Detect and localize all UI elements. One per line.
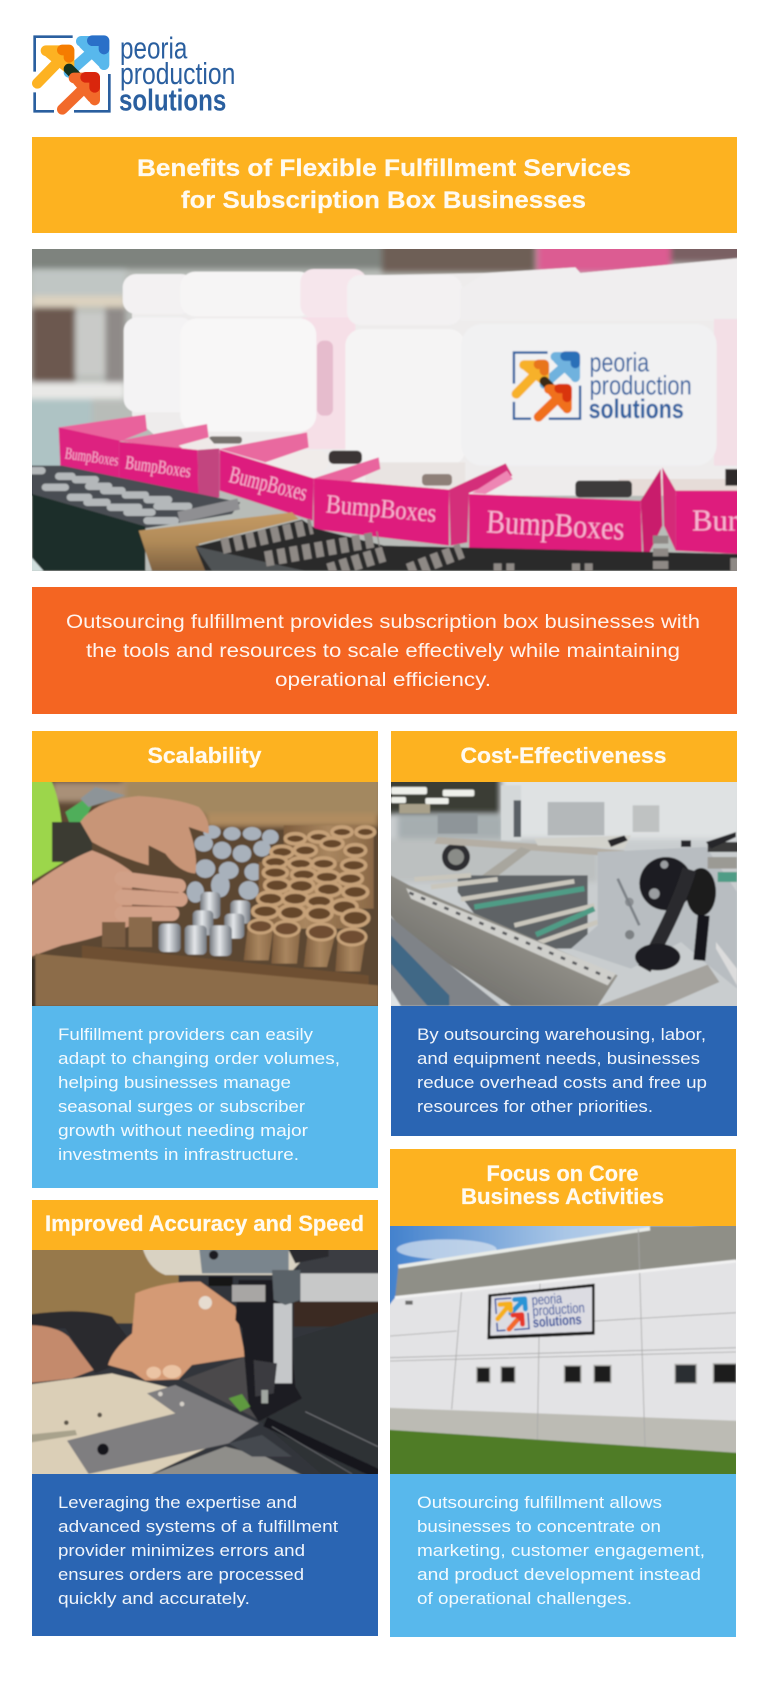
cardboard box front <box>35 954 378 1006</box>
pulleys and timing belt <box>639 857 693 910</box>
text panel: Improved Accuracy and Speed <box>32 1474 378 1636</box>
intro text: operational efficiency. <box>275 669 491 691</box>
intro text: the tools and resources to scale effectively while maintaining <box>86 640 680 662</box>
logo on box lid: peoria <box>590 347 650 378</box>
roller conveyor, right <box>195 520 739 571</box>
hero photo: pink subscription boxes on a conveyor <box>32 249 738 571</box>
sign logo <box>495 1289 586 1334</box>
main hand <box>108 1282 245 1381</box>
panel: Improved Accuracy and Speed <box>25 1200 385 1636</box>
pink box 4 <box>314 457 380 482</box>
wall joints <box>390 1229 736 1446</box>
cardboard tubes, back rows <box>259 825 374 929</box>
pink box 2 <box>119 424 209 451</box>
windows <box>477 1364 737 1383</box>
needle bar and foot <box>235 1280 302 1422</box>
text panel: Improved Accuracy and Speed: Leveraging the expertise and <box>58 1493 297 1512</box>
title text: for Subscription Box Businesses <box>181 187 586 214</box>
title text <box>137 155 631 214</box>
white wall <box>383 1259 743 1423</box>
text panel: Improved Accuracy and Speed: ensures orders are processed <box>58 1565 304 1584</box>
pink box 3 <box>220 432 309 462</box>
rear roller <box>442 843 470 871</box>
logo on box lid: solutions <box>589 393 684 424</box>
logo arrows <box>37 41 104 109</box>
text panel: Scalability: helping businesses manage <box>58 1073 291 1092</box>
sign logo: solutions <box>532 1312 582 1331</box>
text panel: Focus on Core Business Activities: Outsourcing fulfillment allows <box>417 1493 662 1512</box>
intro callout <box>32 587 737 714</box>
heading: Improved Accuracy and Speed: Improved Accuracy and Speed <box>45 1211 364 1236</box>
hero photo: pink subscription boxes on a conveyor: BumpBoxes <box>325 488 438 528</box>
hand in background <box>25 1325 94 1383</box>
text panel: Improved Accuracy and Speed: advanced systems of a fulfillment <box>58 1517 338 1536</box>
lower hand <box>25 850 132 959</box>
text panel: Focus on Core Business Activities: businesses to concentrate on <box>417 1517 661 1536</box>
text panel: Improved Accuracy and Speed: provider minimizes errors and <box>58 1541 305 1560</box>
box dividers <box>102 922 125 947</box>
heading: Focus on Core Business Activities: Focus on Core <box>486 1161 638 1186</box>
pink box 5 <box>469 494 642 564</box>
lower-left side panel <box>384 912 501 1006</box>
heading: Focus on Core Business Activities <box>390 1149 736 1226</box>
photo: Peoria Production Solutions building with sign <box>390 1226 736 1474</box>
intro text <box>66 611 700 691</box>
shredded paper and box contents <box>365 462 465 489</box>
hero photo: pink subscription boxes on a conveyor: BumpBoxes <box>486 503 625 548</box>
panel: Scalability <box>25 731 385 1188</box>
hero photo: pink subscription boxes on a conveyor: Bur <box>692 504 738 538</box>
panel: Cost-Effectiveness <box>384 731 744 1136</box>
metal plates <box>67 1385 259 1474</box>
dark sleeve <box>25 1311 127 1373</box>
logo: peoria production solutions <box>32 31 235 118</box>
text panel: Cost-Effectiveness <box>391 1006 737 1136</box>
upper fascia <box>395 1223 743 1299</box>
security camera <box>405 1301 413 1305</box>
ceiling lights <box>391 787 474 804</box>
logo wordmark: peoria <box>120 31 188 65</box>
text panel: Scalability: adapt to changing order volumes, <box>58 1049 340 1068</box>
text panel: Scalability: seasonal surges or subscriber <box>58 1097 305 1116</box>
dark fabric <box>182 1310 385 1483</box>
cardboard sheet on conveyor <box>139 512 299 571</box>
title banner <box>32 137 737 233</box>
photo: conveyor machinery with timing belt <box>391 782 737 1006</box>
text panel: Scalability: investments in infrastructure. <box>58 1145 299 1164</box>
cross bars and green belts <box>434 837 624 857</box>
stitched seam <box>265 1422 378 1474</box>
roof-edge panel line <box>395 1261 736 1298</box>
upper hand <box>80 796 209 874</box>
text panel: Scalability <box>32 1006 378 1188</box>
text panel: Improved Accuracy and Speed: quickly and accurately. <box>58 1589 250 1608</box>
hero photo: pink subscription boxes on a conveyor: BumpBoxes <box>124 452 192 482</box>
foreground bar <box>598 965 719 1006</box>
logo bracket frame <box>35 37 109 111</box>
logo on box lid: production <box>590 369 692 400</box>
text panel: Cost-Effectiveness: reduce overhead costs and free up <box>417 1073 707 1092</box>
box brand text: BumpBoxes <box>64 443 120 470</box>
sign board <box>487 1284 595 1339</box>
text panel: Scalability: Fulfillment providers can easily <box>58 1025 314 1044</box>
photo: hands sorting parts into cardboard tubes <box>32 782 378 1006</box>
text panel: Focus on Core Business Activities <box>390 1474 736 1637</box>
silver bolts, back rows <box>187 825 279 903</box>
intro text: Outsourcing fulfillment provides subscription box businesses with <box>66 611 700 633</box>
cardboard tubes, front row <box>244 926 366 971</box>
text panel: Focus on Core Business Activities: and product development instead <box>417 1565 701 1584</box>
heading: Cost-Effectiveness: Cost-Effectiveness <box>460 743 666 768</box>
text panel: Cost-Effectiveness: By outsourcing warehousing, labor, <box>417 1025 706 1044</box>
aluminium bracket plate <box>571 847 737 989</box>
main perforated rail <box>384 872 618 1006</box>
title text: Benefits of Flexible Fulfillment Services <box>137 155 631 182</box>
text panel: Focus on Core Business Activities: marketing, customer engagement, <box>417 1541 705 1560</box>
text panel: Cost-Effectiveness: resources for other priorities. <box>417 1097 653 1116</box>
machine head <box>141 1243 325 1275</box>
background columns and windows <box>501 785 521 840</box>
white box lids and panels <box>123 274 194 314</box>
pink box 6 <box>662 467 676 551</box>
cream work table <box>25 1373 259 1483</box>
heading: Focus on Core Business Activities: Business Activities <box>461 1184 664 1209</box>
heading: Scalability <box>32 731 378 782</box>
heading: Cost-Effectiveness <box>391 731 737 782</box>
heading: Scalability: Scalability <box>148 743 262 768</box>
sign logo: production <box>532 1300 585 1320</box>
text panel: Cost-Effectiveness: and equipment needs, businesses <box>417 1049 700 1068</box>
text panel: Scalability: growth without needing major <box>58 1121 308 1140</box>
hero photo: pink subscription boxes on a conveyor: BumpBoxes <box>227 462 310 507</box>
grass <box>383 1429 743 1483</box>
silver bolts, front rows <box>159 892 250 956</box>
white backdrop of opened boxes <box>132 257 745 496</box>
roller conveyor, left <box>25 466 240 528</box>
text panel: Focus on Core Business Activities: of operational challenges. <box>417 1589 632 1608</box>
heading: Improved Accuracy and Speed <box>32 1200 378 1250</box>
photo: hand guiding material through a sewing machine <box>32 1250 378 1474</box>
panel: Focus on Core Business Activities <box>383 1149 743 1637</box>
logo on box lid <box>514 347 692 424</box>
pink box 1 <box>59 415 147 442</box>
sign logo: peoria <box>531 1291 563 1309</box>
